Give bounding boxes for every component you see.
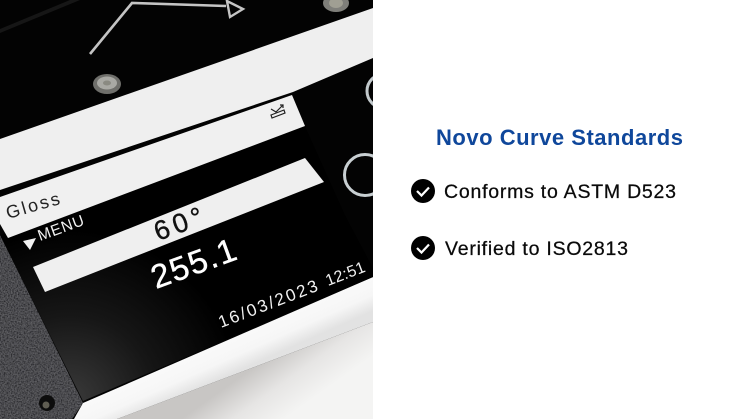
lower right shadow xyxy=(117,322,373,419)
value: 255.1: 255.1 xyxy=(146,231,241,296)
heading: Novo Curve Standards xyxy=(436,125,683,150)
icon: embossed arrow on panel xyxy=(90,1,243,54)
white lower bezel xyxy=(74,277,373,419)
icon: ring button top xyxy=(366,76,373,106)
value: angle 60°: 60° xyxy=(150,201,207,247)
label: MENU: MENU xyxy=(36,212,86,245)
white band xyxy=(0,8,373,190)
label: Gloss: Gloss xyxy=(4,188,62,223)
textured dark casing xyxy=(0,235,83,419)
icon: header measure glyph xyxy=(271,105,285,118)
panel: instrument photo xyxy=(0,0,401,419)
list item: ASTM xyxy=(411,179,676,203)
selected row bar xyxy=(33,158,324,292)
icon: menu triangle xyxy=(23,238,36,250)
icon: check badge xyxy=(411,179,435,203)
icon: casing screw xyxy=(39,395,55,411)
text: ASTM: Conforms to ASTM D523 xyxy=(444,181,676,203)
icon: check badge xyxy=(411,236,435,260)
panel: standards xyxy=(411,125,683,260)
time: 12:51 xyxy=(323,259,368,290)
list item: ISO xyxy=(411,236,628,260)
icon: screw left xyxy=(93,74,121,94)
display header strip xyxy=(0,95,305,238)
panel: display screen xyxy=(0,95,373,401)
icon: ring button lower xyxy=(343,153,373,197)
date: 16/03/2023 xyxy=(216,276,320,332)
top black slot detail xyxy=(0,0,80,33)
text: ISO: Verified to ISO2813 xyxy=(445,238,628,260)
icon: screw right xyxy=(323,0,349,12)
